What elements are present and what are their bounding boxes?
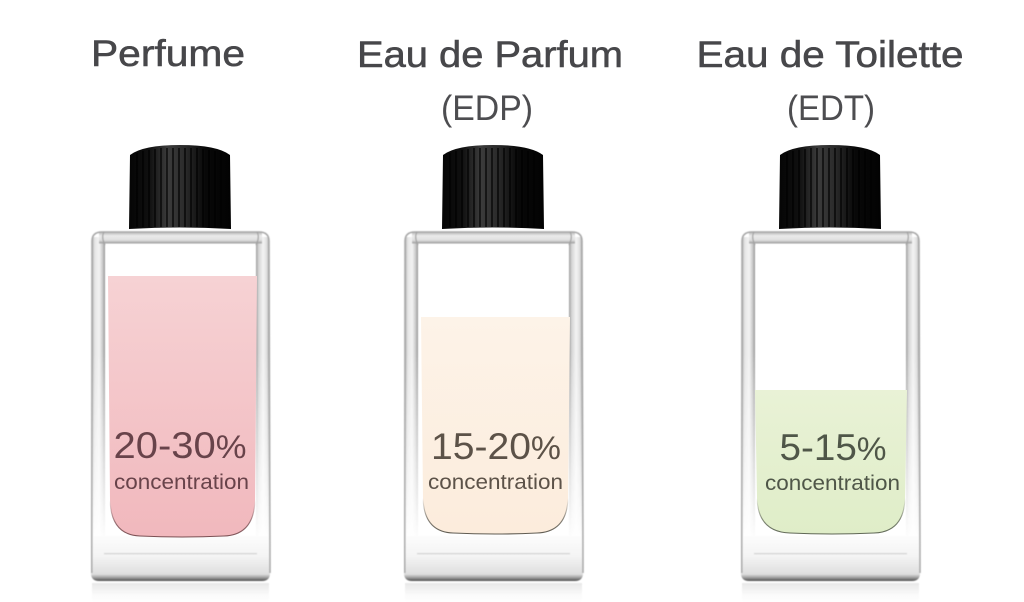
heading: Eau de Toilette (EDT): (EDT) [787, 89, 875, 128]
bottle cap [779, 145, 881, 229]
label: 20-30% concentration [114, 425, 249, 494]
label: 15-20% concentration: 15-20% [431, 426, 561, 467]
heading: Eau de Parfum (EDP) [357, 34, 623, 128]
bottle: Eau de Toilette [741, 145, 920, 602]
liquid: Perfume pink [108, 276, 257, 537]
liquid bottom outline [423, 498, 568, 534]
label: 20-30% concentration: concentration [114, 470, 249, 494]
liquid bottom outline [757, 498, 905, 534]
label: 15-20% concentration [428, 426, 563, 494]
liquid bottom outline [110, 500, 255, 537]
label: 5-15% concentration: 5-15% [780, 427, 886, 468]
heading: Eau de Parfum (EDP): (EDP) [441, 89, 533, 128]
bottle glass [91, 232, 270, 602]
heading: Eau de Toilette (EDT): Eau de Toilette [696, 34, 964, 75]
liquid: EDP cream [421, 317, 570, 534]
liquid: EDT green [755, 390, 907, 534]
bottle cap [129, 145, 231, 229]
bottle cap [442, 145, 544, 229]
bottle: Perfume [91, 145, 270, 602]
bottle glass [741, 232, 920, 602]
bottle glass [404, 232, 583, 602]
label: 20-30% concentration: 20-30% [114, 425, 246, 466]
label: 5-15% concentration: concentration [765, 471, 900, 495]
bottle: Eau de Parfum [404, 145, 583, 602]
label: 15-20% concentration: concentration [428, 470, 563, 494]
heading: Eau de Toilette (EDT) [696, 34, 964, 128]
label: 5-15% concentration [765, 427, 900, 495]
heading: Eau de Parfum (EDP): Eau de Parfum [357, 34, 623, 75]
heading: Perfume: Perfume [91, 33, 245, 74]
